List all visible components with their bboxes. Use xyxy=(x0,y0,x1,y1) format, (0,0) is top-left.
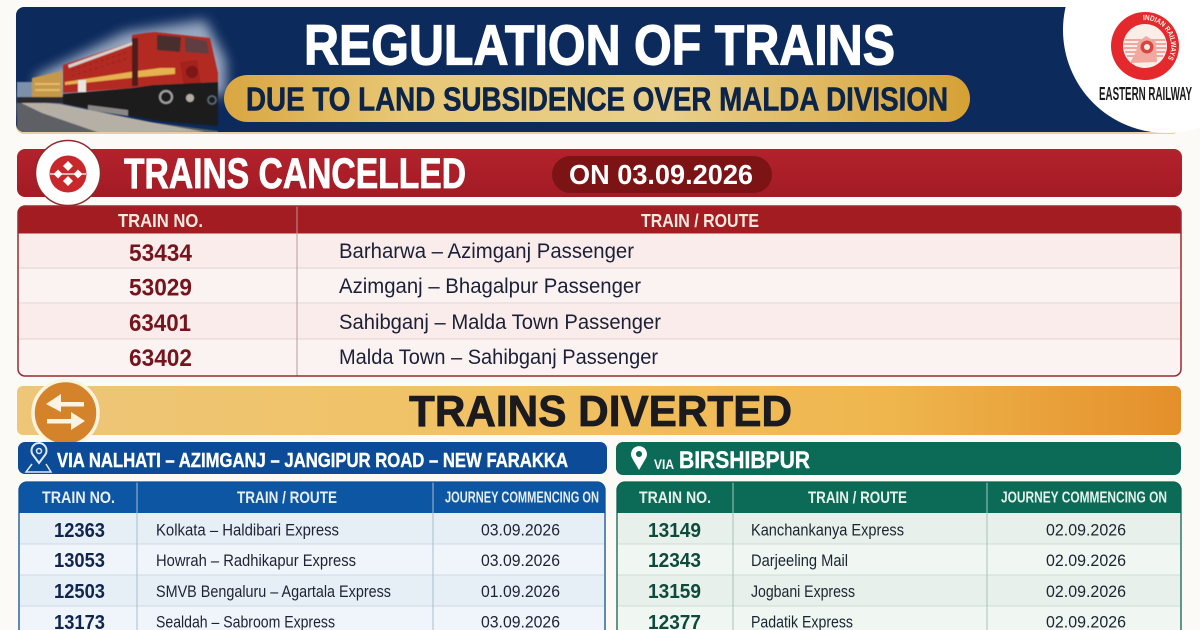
column headers: TRAIN NO. xyxy=(118,210,203,231)
train photo xyxy=(0,20,226,133)
routes: Sahibganj – Malda Town Passenger xyxy=(339,311,661,334)
train numbers: 53434 xyxy=(129,240,193,267)
panel: route via Birshibpur heading xyxy=(616,442,1181,475)
routes: Azimganj – Bhagalpur Passenger xyxy=(339,275,641,298)
subtitle pill: DUE TO LAND SUBSIDENCE OVER MALDA DIVISION xyxy=(246,80,948,118)
column headers: TRAIN / ROUTE xyxy=(641,210,759,231)
header banner xyxy=(0,7,1180,134)
routes: Howrah – Radhikapur Express xyxy=(156,551,356,570)
table: trains cancelled xyxy=(18,206,1181,376)
train numbers: 63401 xyxy=(129,310,191,337)
icon: map pin xyxy=(26,443,51,472)
icon: map pin xyxy=(631,446,647,470)
routes: Kanchankanya Express xyxy=(751,520,904,540)
icon: Indian Railways emblem xyxy=(1111,12,1179,80)
journey dates xyxy=(481,520,560,630)
train numbers: 13159 xyxy=(648,580,701,603)
heading: TRAINS CANCELLED xyxy=(124,150,466,198)
locomotive underframe xyxy=(63,82,218,126)
train numbers: 13149 xyxy=(648,519,701,542)
column headers xyxy=(118,210,759,231)
column headers: TRAIN NO. xyxy=(42,488,115,507)
train numbers: 12343 xyxy=(648,549,701,572)
column headers: TRAIN / ROUTE xyxy=(808,488,907,507)
locomotive body xyxy=(63,32,218,93)
panel: trains diverted header xyxy=(17,380,1181,446)
train numbers: 12363 xyxy=(54,519,105,542)
train numbers xyxy=(129,240,193,372)
route title: VIA xyxy=(654,456,674,472)
journey dates: 02.09.2026 xyxy=(1046,520,1126,540)
routes: Malda Town – Sahibganj Passenger xyxy=(339,346,658,369)
route title: BIRSHIBPUR xyxy=(679,447,810,474)
column headers: JOURNEY COMMENCING ON xyxy=(445,490,599,506)
routes: Kolkata – Haldibari Express xyxy=(156,520,339,540)
heading: TRAINS DIVERTED xyxy=(409,387,792,436)
column headers: TRAIN / ROUTE xyxy=(237,488,337,507)
train numbers: 13053 xyxy=(54,549,105,572)
column headers: TRAIN NO. xyxy=(639,488,711,507)
route title: VIA NALHATI – AZIMGANJ – JANGIPUR ROAD – NEW FARAKKA xyxy=(57,449,568,472)
table: via Nalhati xyxy=(19,482,605,630)
routes xyxy=(751,520,904,630)
routes: Darjeeling Mail xyxy=(751,551,848,570)
table: via Birshibpur xyxy=(617,482,1181,630)
column headers xyxy=(639,488,1167,507)
routes: Barharwa – Azimganj Passenger xyxy=(339,240,634,263)
date pill: ON 03.09.2026 xyxy=(569,159,753,190)
icon: cancelled badge xyxy=(36,140,100,206)
journey dates xyxy=(1046,520,1126,630)
train numbers: 12503 xyxy=(54,580,105,603)
panel: trains cancelled header xyxy=(17,140,1182,206)
train numbers: 63402 xyxy=(129,345,192,372)
routes xyxy=(156,520,391,630)
icon: Indian Railways emblem: INDIAN RAILWAYS xyxy=(1143,14,1176,60)
train numbers xyxy=(54,519,105,630)
journey dates: 03.09.2026 xyxy=(481,551,560,570)
icon: swap arrows xyxy=(33,380,98,446)
train numbers: 53029 xyxy=(129,274,192,302)
routes xyxy=(339,240,661,369)
journey dates: 02.09.2026 xyxy=(1046,582,1126,601)
routes: Jogbani Express xyxy=(751,582,855,601)
title: REGULATION OF TRAINS xyxy=(304,14,895,78)
journey dates: 02.09.2026 xyxy=(1046,551,1126,570)
train numbers xyxy=(648,519,701,630)
journey dates: 01.09.2026 xyxy=(481,582,560,601)
logo badge xyxy=(1063,7,1192,133)
journey dates: 03.09.2026 xyxy=(481,520,560,540)
subtitle pill xyxy=(224,75,970,122)
routes: SMVB Bengaluru – Agartala Express xyxy=(156,582,391,601)
panel: route via Nalhati heading xyxy=(18,442,607,474)
column headers xyxy=(42,488,599,507)
